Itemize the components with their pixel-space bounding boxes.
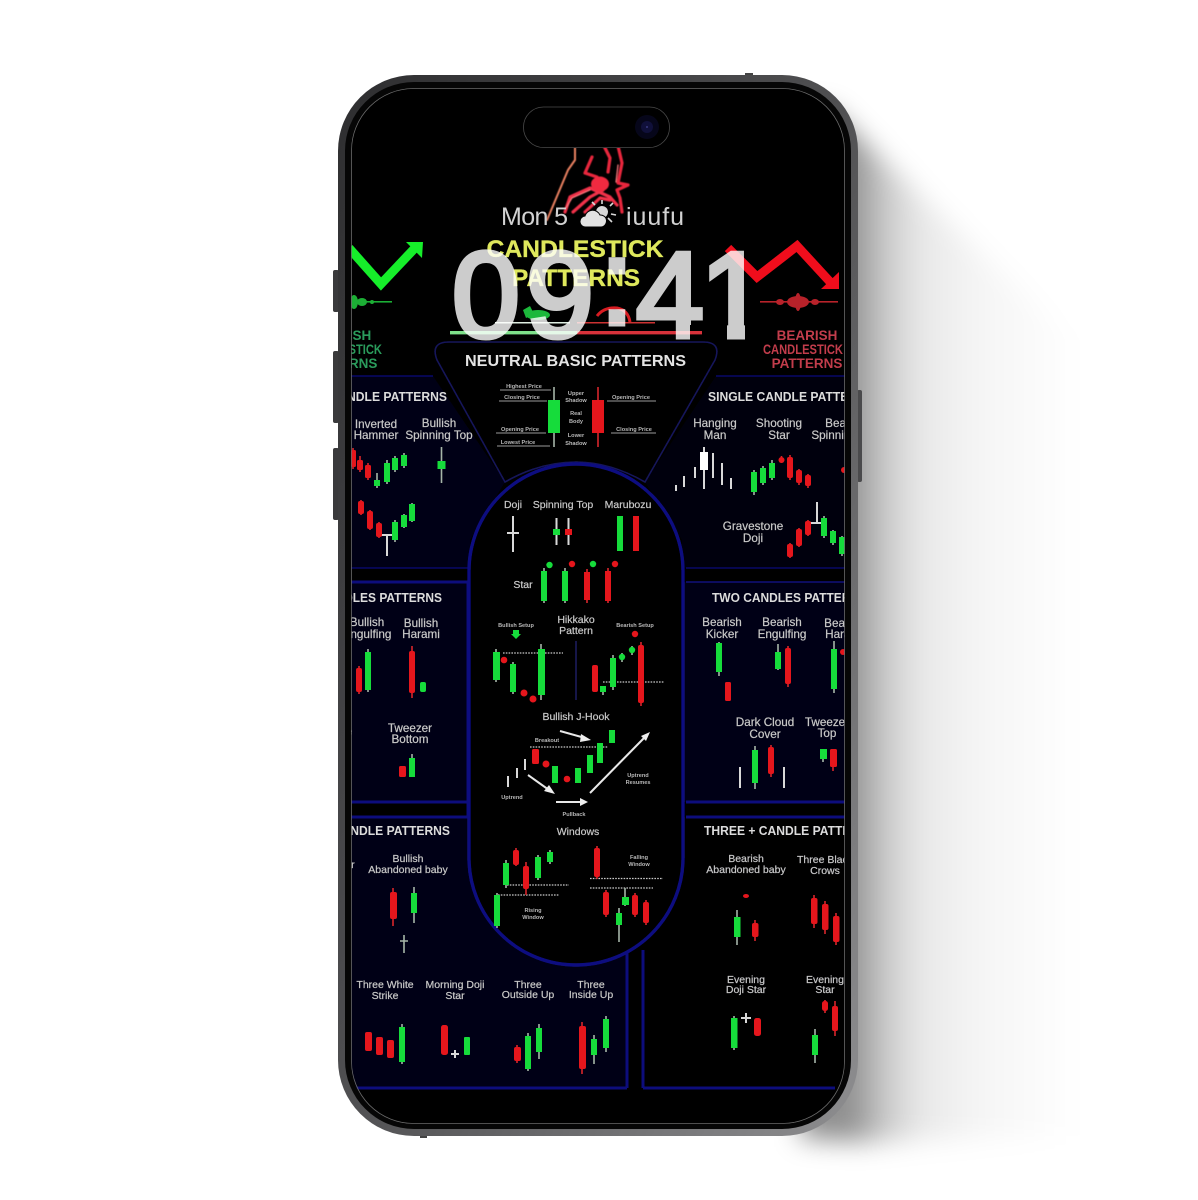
pattern: doji (504, 499, 522, 552)
pattern: tweezer bottom (388, 722, 432, 777)
pattern: bearish harami: Harami (825, 628, 863, 641)
panel divider lines (351, 376, 845, 1088)
neutral diagram: anatomy of candles: Opening Price (612, 395, 650, 401)
pattern: shooting star (751, 417, 811, 495)
pattern: evening doji star (726, 974, 767, 1050)
pattern: inverted hammer: Hammer (354, 429, 399, 442)
pattern: bullish harami: Bullish (404, 617, 438, 630)
pattern: tweezer top (805, 716, 849, 771)
pattern: tweezer top: Top (818, 727, 837, 740)
pattern: three black crows: Three Black (797, 854, 854, 866)
pattern: three black crows: Crows (810, 865, 840, 877)
icon: cloud and sun (580, 200, 616, 227)
pattern: gravestone doji: Doji (743, 532, 763, 545)
pattern: morning doji star: Morning Doji (426, 979, 484, 991)
pattern: star (513, 561, 618, 603)
bull and bear emblem (450, 306, 702, 334)
pattern: bullish abandoned baby: Bullish (393, 853, 424, 865)
pattern: bullish engulfing (351, 617, 391, 694)
neutral diagram: anatomy of candles: Closing Price (504, 395, 540, 401)
pattern: three white strike: Three White (356, 979, 414, 991)
pattern: bullish abandoned baby (368, 853, 448, 953)
pattern: windows: Window (522, 915, 544, 921)
pattern: bearish spinning top: Spinning Top (811, 429, 879, 442)
heading: single candle patterns right: SINGLE CANDLE PATTERNS (708, 390, 874, 404)
bearish red arrow (728, 246, 839, 289)
phone frame (333, 73, 862, 1138)
pattern: three inside up (569, 979, 613, 1074)
pattern: bullish J-hook: Resumes (626, 780, 650, 786)
pattern: evening star: Evening (806, 974, 844, 986)
pattern: windows: Windows (557, 826, 599, 838)
pattern: bullish J-hook: Uptrend (501, 795, 523, 801)
pattern: bullish J-hook (501, 711, 650, 818)
pattern: bullish engulfing: Engulfing (343, 628, 391, 641)
neutral patterns trapezoid panel (435, 342, 717, 482)
pattern: piercing line (clipped): Piercing Line (292, 726, 353, 738)
pattern: bearish engulfing (758, 616, 806, 687)
pattern: bearish harami: Bearish (824, 617, 864, 630)
pattern: bearish abandoned baby: Bearish (728, 853, 764, 865)
pattern: three white strike: Strike (372, 990, 399, 1002)
bullish label: PATTERNS (307, 356, 377, 371)
title (486, 236, 664, 292)
title: CANDLESTICK (486, 236, 664, 263)
pattern: inverted hammer: Inverted (355, 418, 397, 431)
pattern: morning doji star: Star (445, 990, 465, 1002)
pattern: windows: Rising (524, 908, 542, 914)
heading: single candle patterns left: SINGLE CANDLE PATTERNS (281, 390, 447, 404)
pattern: bearish abandoned baby: Abandoned baby (706, 864, 786, 876)
pattern: dark cloud cover (736, 716, 794, 789)
phone drop shadow (800, 110, 1085, 1142)
pattern: spinning top: Spinning Top (533, 499, 593, 511)
pattern: windows: Window (628, 862, 650, 868)
pattern: gravestone doji (723, 502, 845, 558)
pattern: morning star: Star (335, 859, 355, 871)
pattern: bearish spinning top: Bearish (825, 417, 865, 430)
bearish label: CANDLESTICK (763, 342, 843, 357)
bullish ornament (350, 295, 392, 309)
bullish label: CANDLESTICK (302, 342, 382, 357)
bearish ornament (760, 293, 838, 311)
pattern: dark cloud cover: Dark Cloud (736, 716, 794, 729)
pattern: hanging man: Hanging (693, 417, 737, 430)
icon: front camera (635, 115, 659, 139)
pattern: inverted hammer (351, 418, 407, 488)
pattern: evening star (806, 974, 844, 1063)
neutral diagram: anatomy of candles: Shadow (565, 441, 587, 447)
central pill panel (469, 464, 683, 965)
lock screen date and weather (501, 200, 684, 231)
pattern: tweezer bottom: Tweezer (388, 722, 432, 735)
heading: two candles patterns right: TWO CANDLES PATTERNS (712, 591, 867, 605)
pattern: hanging man: Man (704, 429, 726, 442)
pattern: bullish engulfing: Bullish (350, 616, 384, 629)
pattern: bearish harami (824, 617, 864, 693)
pattern: bearish spinning top (812, 418, 845, 473)
neutral diagram: anatomy of candles: Shadow (565, 398, 587, 404)
pattern: tweezer bottom: Bottom (391, 733, 429, 746)
pattern: bearish kicker: Bearish (702, 616, 742, 629)
pattern: windows: Falling (630, 855, 649, 861)
pattern: hikkako: Pattern (559, 625, 593, 637)
pattern: bullish J-hook: Uptrend (627, 773, 649, 779)
pattern: evening star: Star (815, 984, 835, 996)
pattern: three white strike (356, 979, 414, 1064)
pattern: marubozu (605, 499, 652, 551)
pattern: bearish engulfing: Bearish (762, 616, 802, 629)
pattern: hikkako: Hikkako (557, 614, 595, 626)
pattern: hikkako: Bullish Setup (498, 623, 534, 629)
pattern: bearish engulfing: Engulfing (758, 628, 806, 641)
lock screen date and weather: iuufu (626, 203, 684, 231)
pattern: hikkako: Bearish Setup (616, 623, 654, 629)
bullish label: BULLISH (313, 328, 371, 343)
pattern: three inside up: Inside Up (569, 989, 613, 1001)
pattern: windows (494, 826, 663, 942)
bull and bear sketch (547, 146, 628, 220)
screen wallpaper (351, 88, 845, 1124)
heading: three candle patterns left: THREE + CANDLE PATTERNS (278, 824, 450, 838)
pattern: bullish abandoned baby: Abandoned baby (368, 864, 448, 876)
lock screen clock: 09:41 (452, 214, 768, 363)
pattern: bullish J-hook: Pullback (562, 812, 586, 818)
neutral diagram: anatomy of candles: Closing Price (616, 427, 652, 433)
neutral diagram: anatomy of candles: Upper (568, 391, 585, 397)
pattern: bullish spinning top (405, 417, 473, 483)
neutral diagram: anatomy of candles (496, 384, 656, 447)
pattern: bullish spinning top: Bullish (422, 417, 456, 430)
pattern: bullish harami: Harami (402, 628, 440, 641)
pattern: star: Star (513, 579, 533, 591)
pattern: marubozu: Marubozu (605, 499, 652, 511)
pattern: bearish abandoned baby (706, 853, 786, 945)
neutral diagram: anatomy of candles: Real (570, 411, 582, 417)
pattern: hikkako (493, 614, 664, 706)
dynamic island (524, 107, 670, 148)
pattern: shooting star: Shooting (756, 417, 802, 430)
panel backgrounds (351, 376, 845, 1088)
pattern: three outside up: Outside Up (502, 989, 554, 1001)
pattern: bullish spinning top: Spinning Top (405, 429, 473, 442)
pattern: three black crows (797, 854, 854, 945)
neutral panel heading: NEUTRAL BASIC PATTERNS (465, 353, 686, 370)
screen hairline edge (352, 88, 844, 1124)
bullish green arrow (349, 242, 423, 284)
neutral diagram: anatomy of candles: Body (569, 419, 584, 425)
pattern: bullish harami (402, 617, 440, 698)
neutral diagram: anatomy of candles: Highest Price (506, 384, 542, 390)
pattern: evening doji star: Evening (727, 974, 765, 986)
lock screen date and weather: Mon 5 (501, 203, 568, 231)
pattern: bearish kicker: Kicker (706, 628, 738, 641)
pattern: hanging man (676, 417, 737, 491)
pattern: hammer (358, 500, 415, 556)
bearish label: PATTERNS (772, 356, 842, 371)
bearish label: BEARISH (777, 328, 837, 343)
pattern: bullish J-hook: Breakout (535, 738, 559, 744)
pattern: bearish kicker (702, 616, 742, 701)
neutral diagram: anatomy of candles: Lower (568, 433, 585, 439)
neutral diagram: anatomy of candles: Lowest Price (501, 440, 535, 446)
pattern: spinning top (533, 499, 593, 545)
pattern: bullish J-hook: Bullish J-Hook (542, 711, 610, 723)
pattern: evening doji star: Doji Star (726, 984, 767, 996)
bullish label (302, 328, 382, 371)
pattern: dark cloud cover: Cover (749, 728, 781, 741)
pattern: gravestone doji: Gravestone (723, 520, 783, 533)
bearish label (763, 328, 843, 371)
pattern: tweezer top: Tweezer (805, 716, 849, 729)
pattern: three inside up: Three (577, 979, 605, 991)
title: PATTERNS (512, 265, 640, 292)
heading: three candle patterns right: THREE + CANDLE PATTERNS (704, 824, 876, 838)
pattern: morning doji star (426, 979, 484, 1058)
pattern: shooting star: Star (768, 429, 790, 442)
neutral diagram: anatomy of candles: Opening Price (501, 427, 539, 433)
pattern: three outside up (502, 979, 554, 1071)
pattern: three outside up: Three (514, 979, 542, 991)
heading: two candles patterns left: TWO CANDLES PATTERNS (287, 591, 442, 605)
pattern: doji: Doji (504, 499, 522, 511)
